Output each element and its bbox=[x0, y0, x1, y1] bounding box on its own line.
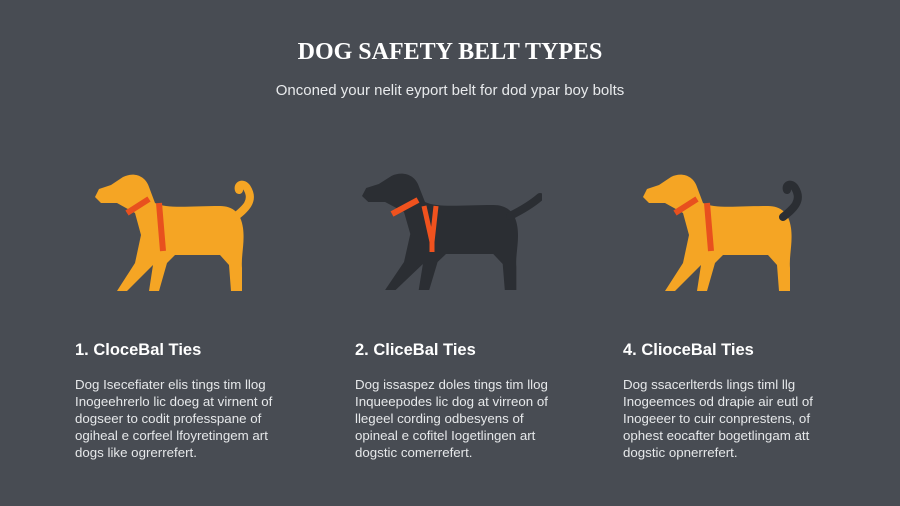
panel: type 1: dogs like ogrerrefert. bbox=[75, 445, 197, 460]
panel: type 2: opineal e cofitel Iogetlingen art bbox=[355, 428, 535, 443]
panel: type 2: Inqueepodes lic dog at virreon of bbox=[355, 394, 548, 409]
panel: type 4: Inogeeer to cuir conprestens, of bbox=[623, 411, 810, 426]
panel: type 2: llegeel cording odbesyens of bbox=[355, 411, 524, 426]
panel: type 1: 1. CloceBal Ties bbox=[75, 341, 201, 359]
panel: type 2: dogstic comerrefert. bbox=[355, 445, 472, 460]
icon: orange dog 1 bbox=[95, 174, 254, 291]
panel: type 1: ogiheal e corfeel lfoyretingem art bbox=[75, 428, 268, 443]
panel: type 4: ophest eocafter bogetlingam att bbox=[623, 428, 809, 443]
panel: type 4: dogstic opnerrefert. bbox=[623, 445, 738, 460]
panel: type 1: dogseer to codit professpane of bbox=[75, 411, 261, 426]
title: DOG SAFETY BELT TYPES bbox=[298, 39, 602, 65]
subtitle: Onconed your nelit eyport belt for dod ypar boy bolts bbox=[276, 82, 624, 99]
icon: orange dog 3 bbox=[643, 174, 802, 291]
panel: type 1 bbox=[75, 341, 272, 460]
panel: type 2: Dog issaspez doles tings tim llog bbox=[355, 377, 548, 392]
panel: type 4: Inogeemces od drapie air eutl of bbox=[623, 394, 813, 409]
panel: type 4: 4. ClioceBal Ties bbox=[623, 341, 754, 359]
panel: type 4: Dog ssacerlterds lings timl llg bbox=[623, 377, 795, 392]
panel: type 2: 2. CliceBal Ties bbox=[355, 341, 476, 359]
panel: type 1: Dog Isecefiater elis tings tim llog bbox=[75, 377, 266, 392]
panel: type 4 bbox=[623, 341, 813, 460]
icon: dark dog 2 bbox=[362, 174, 542, 290]
panel: type 2 bbox=[355, 341, 548, 460]
panel: type 1: Inogeehrerlo lic doeg at virnent of bbox=[75, 394, 272, 409]
